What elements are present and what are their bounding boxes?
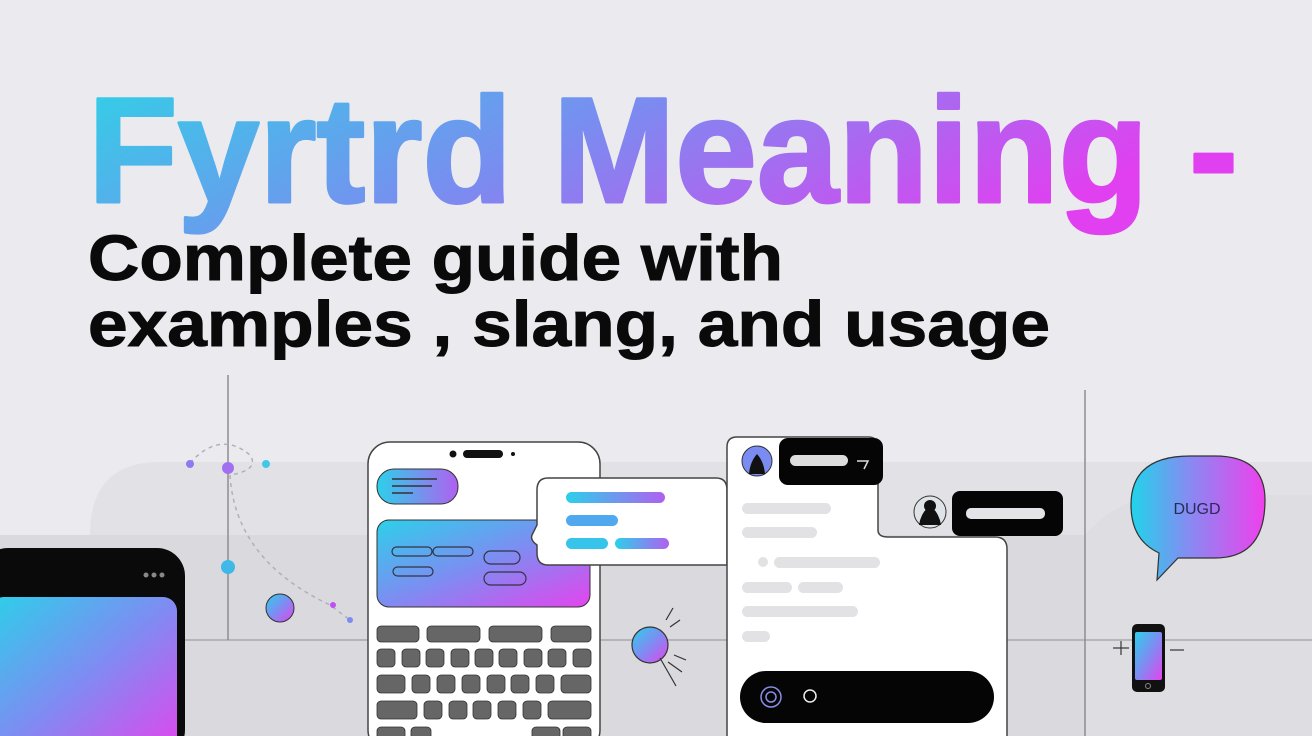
popup bubble (532, 478, 727, 565)
subtitle (88, 222, 1050, 360)
speech bubble DUGD: DUGD (1173, 501, 1221, 518)
subtitle: Complete guide with (88, 222, 783, 294)
subtitle: examples , slang, and usage (88, 288, 1050, 360)
second avatar message (914, 491, 1063, 536)
ornament icon (632, 608, 686, 686)
decorative path dots (186, 444, 353, 623)
tablet left (0, 548, 185, 736)
background band (90, 462, 1312, 736)
small phone icon (1113, 624, 1184, 692)
speech bubble DUGD (1131, 456, 1265, 580)
title: Fyrtrd Meaning - (88, 66, 1238, 234)
chat panel (727, 437, 1007, 736)
phone (368, 442, 600, 736)
